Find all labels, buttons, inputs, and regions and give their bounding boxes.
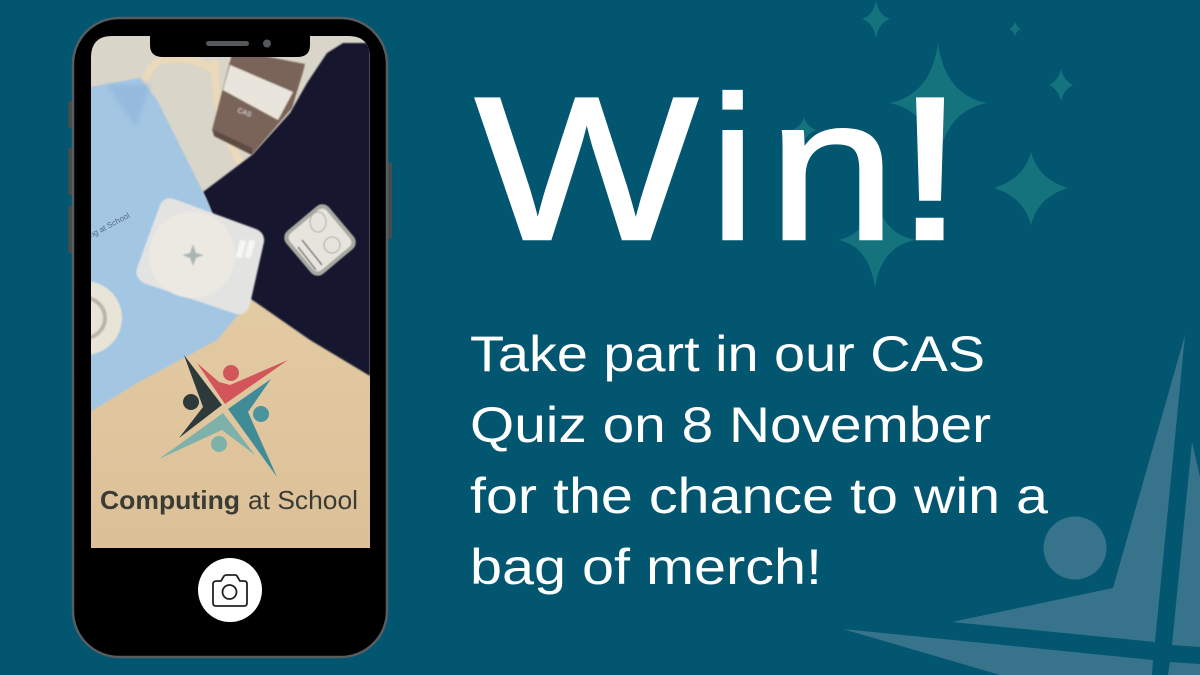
body text: bag of merch!: [470, 538, 822, 595]
phone mockup: [48, 18, 387, 657]
phone side buttons: [68, 101, 392, 253]
coffee cup: CAS: [236, 107, 253, 119]
navy shirt: [203, 43, 370, 376]
body text: Take part in our CAS: [470, 325, 985, 382]
phone notch: [150, 34, 310, 57]
phone body: [73, 18, 387, 657]
shirt logo text: ng at School: [88, 211, 131, 240]
body text: for the chance to win a: [470, 467, 1049, 524]
heading: Win!: i: [710, 55, 755, 283]
heading: Win!: W: [475, 55, 698, 283]
heading: Win!: n: [768, 55, 896, 283]
shirt collar shading: [107, 85, 150, 127]
bag handles: [146, 58, 243, 167]
blue shirt: [90, 78, 248, 412]
body text: Quiz on 8 November: [470, 396, 991, 453]
logo wordmark: [101, 490, 356, 514]
earphones box: [284, 204, 356, 276]
wound cable disc: [91, 280, 123, 356]
coffee cup: [212, 50, 305, 155]
heading: Win!: !: [894, 55, 966, 283]
decorative sparkle stars: [792, 0, 1073, 288]
icon: camera: [213, 575, 247, 606]
shutter button: [198, 558, 262, 622]
tote bag: [91, 300, 370, 548]
body text: [470, 325, 1049, 595]
camera dot: [263, 40, 271, 48]
merch photo: [91, 36, 370, 548]
Computing at School logo: [159, 355, 288, 477]
decorative large logo shapes bottom right: [843, 335, 1200, 675]
logo wordmark: at School: [248, 485, 358, 515]
speaker: [206, 41, 249, 46]
logo wordmark: Computing: [100, 485, 240, 515]
disc case: [136, 198, 264, 314]
